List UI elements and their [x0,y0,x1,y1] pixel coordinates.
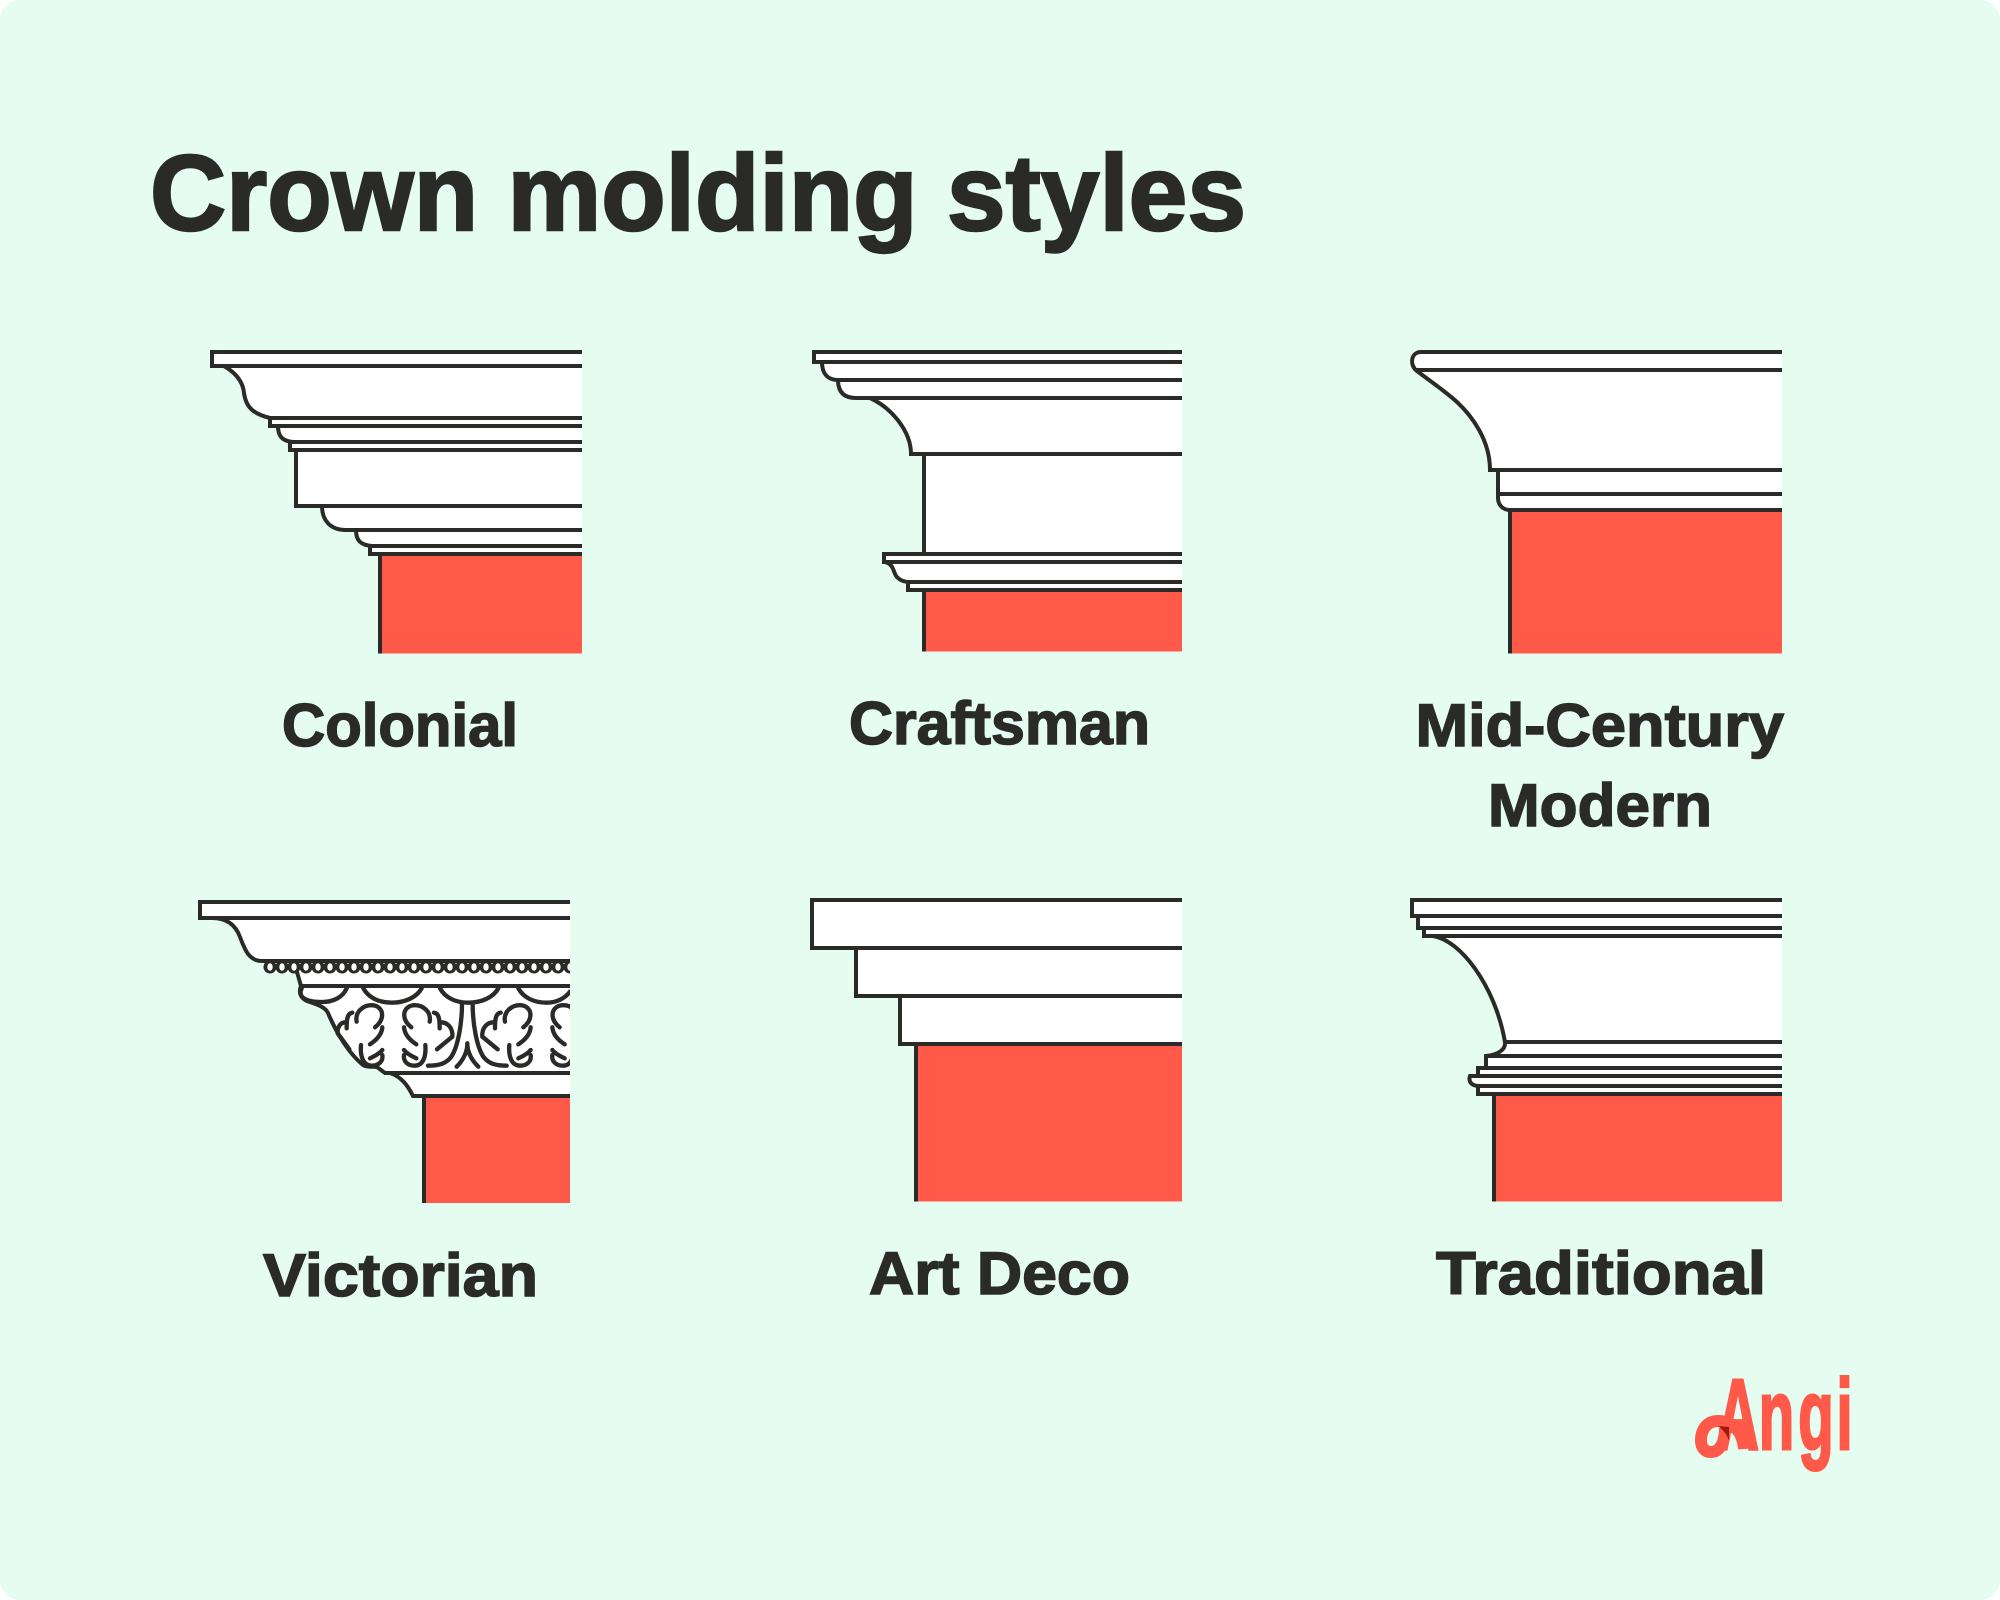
Mid-Century molding profile [1412,352,1782,510]
logo swash [1701,1421,1744,1452]
label: Traditional: Traditional [1436,1240,1766,1307]
Art Deco profile lines [812,948,1182,1202]
Traditional molding profile [1412,900,1782,1094]
panel: Mid-Century Modern molding [1412,352,1782,654]
logo swash shadow [1718,1426,1729,1441]
Colonial profile lines [224,366,582,654]
Art Deco red wall [916,1044,1182,1202]
label: Mid-Century Modern: Mid-Century [1416,692,1785,759]
logo wordmark: Angi [1717,1360,1853,1471]
Victorian red wall [424,1096,570,1203]
label: Victorian: Victorian [263,1242,538,1309]
panel: Art Deco molding [812,900,1182,1202]
logo: Angi [1701,1360,1853,1471]
label: Craftsman: Craftsman [849,690,1150,757]
label: Mid-Century Modern: Modern [1488,772,1712,839]
Mid-Century profile lines [1417,370,1782,654]
Craftsman molding profile [814,352,1182,590]
title: Crown molding styles [150,132,1246,253]
Mid-Century red wall [1510,510,1782,654]
Victorian molding outline [200,902,570,1096]
Colonial molding profile [212,352,582,554]
label: Art Deco: Art Deco [869,1240,1130,1307]
label: Colonial: Colonial [282,692,518,759]
Victorian molding fill [200,902,570,1096]
panel: Traditional molding [1412,900,1782,1202]
logo loop counter [1707,1427,1719,1451]
Craftsman red wall [924,590,1182,652]
Traditional profile lines [1412,916,1782,1202]
Victorian profile lines [212,918,570,1203]
Traditional red wall [1494,1094,1782,1202]
Colonial red wall [380,554,582,654]
label: Mid-Century Modern [1416,692,1785,839]
panel: Victorian molding [200,902,601,1203]
Victorian bead row [264,963,570,974]
Craftsman profile lines [822,362,1182,652]
panel: Colonial molding [212,352,582,654]
panel: Craftsman molding [814,352,1182,652]
Victorian leaf frieze [300,988,601,1067]
Art Deco molding profile [812,900,1182,1044]
